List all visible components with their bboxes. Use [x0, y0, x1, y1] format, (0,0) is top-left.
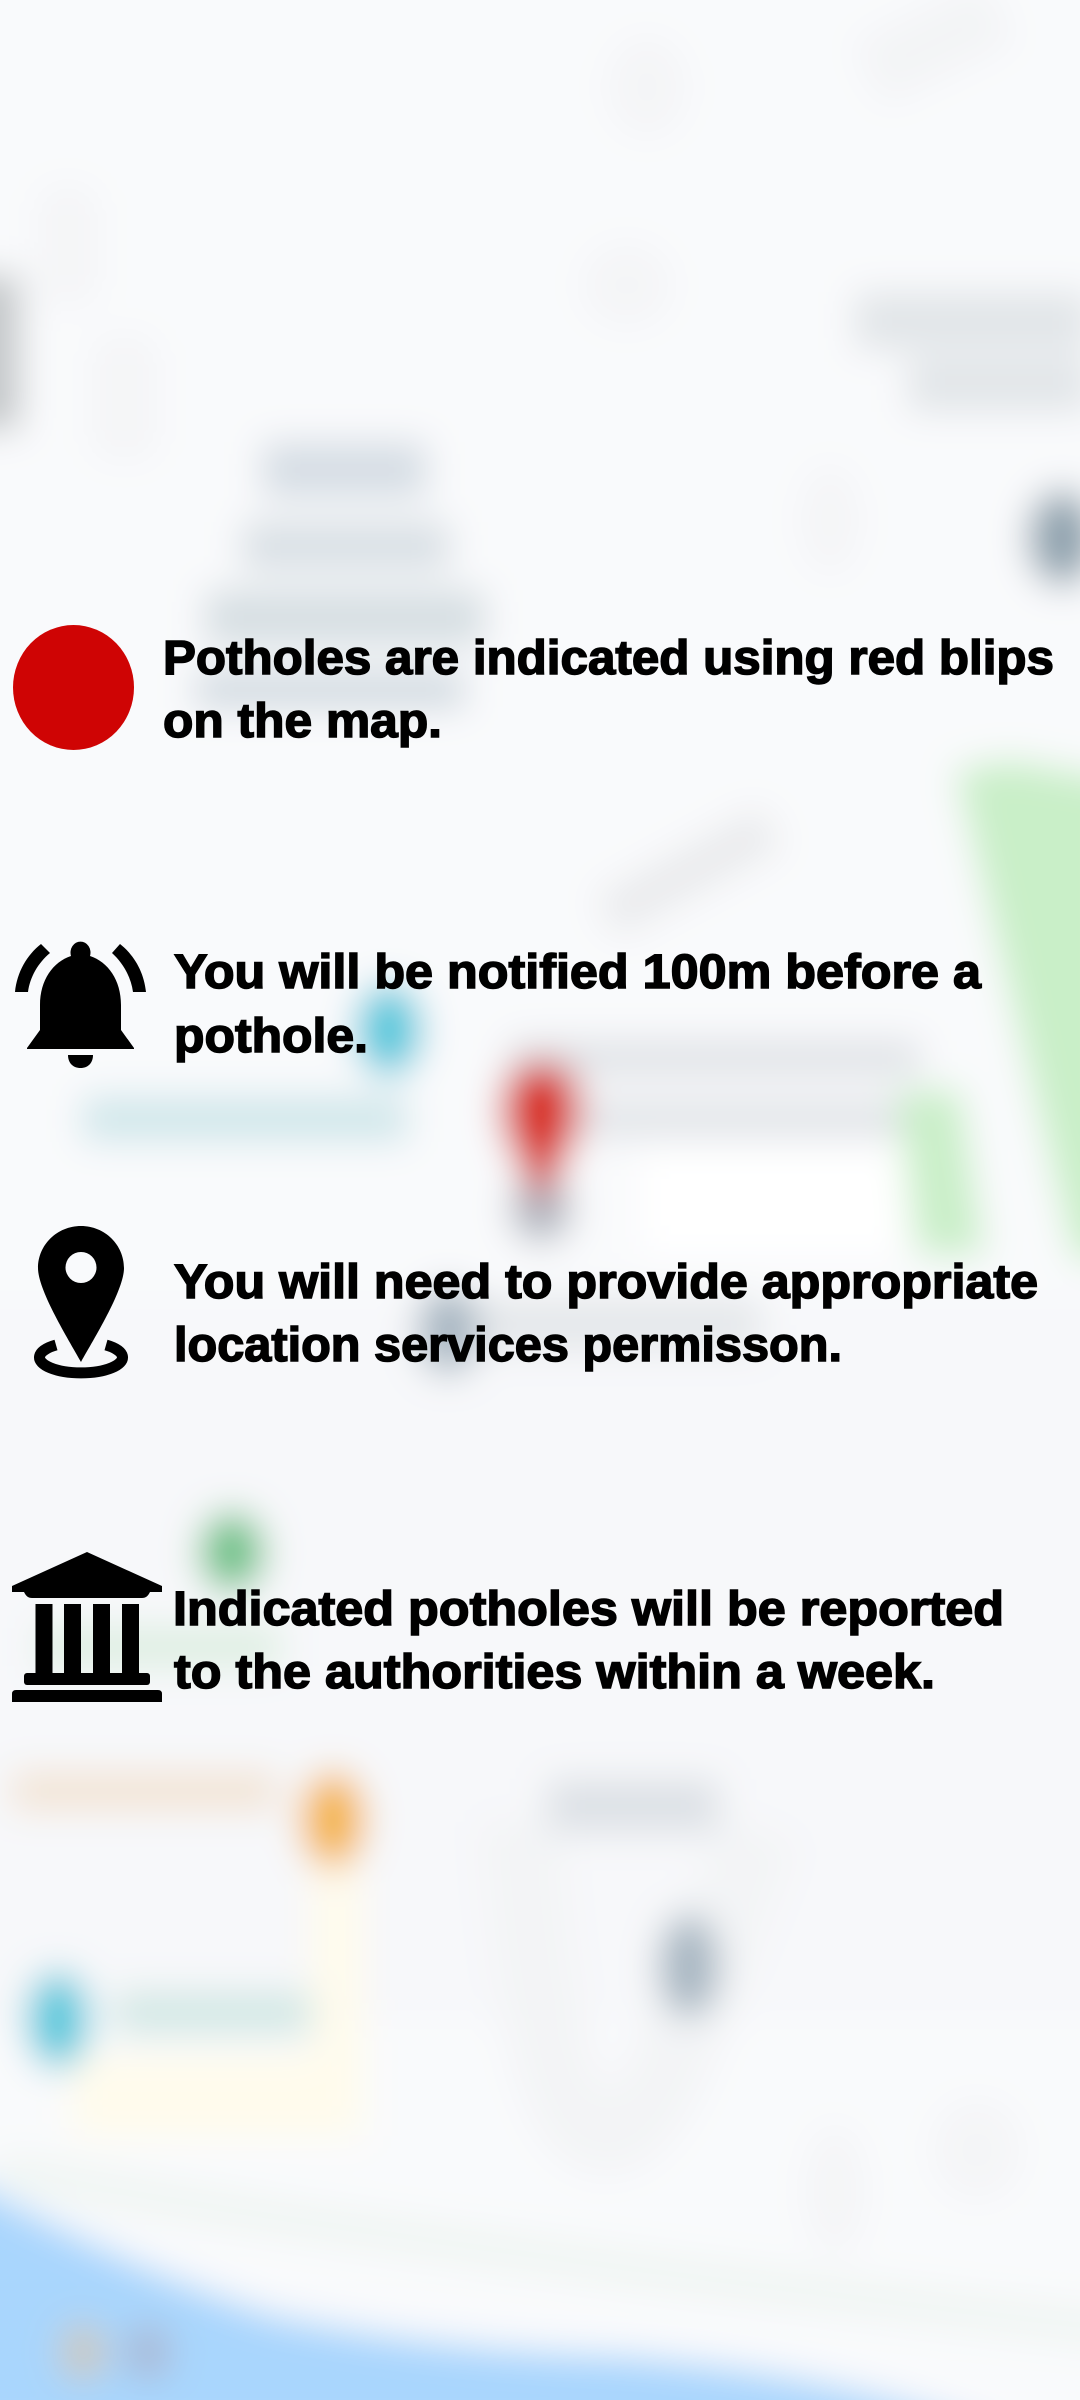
text: notification: pothole.	[174, 1010, 368, 1063]
map: faint roads and labels	[613, 823, 764, 921]
icon: bell	[15, 942, 146, 1068]
text: red blips: on the map.	[163, 695, 442, 748]
text: location permission	[174, 1256, 1038, 1372]
map: water	[0, 2165, 1010, 2400]
text: red blips: Potholes are indicated using red blips	[163, 632, 1054, 685]
text: notification: You will be notified 100m before a	[174, 946, 981, 999]
text: authorities	[173, 1583, 1004, 1699]
text: location permission: location services permisson.	[174, 1319, 842, 1372]
map: shoreline green strip	[0, 2170, 1080, 2330]
map: corner logo	[61, 2324, 170, 2380]
text: red blips	[163, 632, 1054, 748]
map: coloured label blocks	[12, 1096, 408, 2034]
map: grey label blocks	[0, 275, 1080, 1832]
text: location permission: You will need to provide appropriate	[174, 1256, 1038, 1309]
map: green pin	[199, 1512, 265, 1592]
icon: location pin	[38, 1226, 124, 1373]
icon: red blip	[13, 625, 134, 750]
map: orange pin	[301, 1772, 365, 1868]
map: pale road yellow	[72, 1870, 362, 2136]
icon: government building	[12, 1552, 162, 1702]
map: green park	[895, 760, 1080, 1260]
text: authorities: Indicated potholes will be reported	[173, 1583, 1004, 1636]
map: white block	[640, 1145, 905, 1255]
map: red pin	[501, 1062, 581, 1200]
map: cyan pins	[27, 984, 422, 2068]
map: grey pins	[418, 490, 1080, 2018]
text: notification	[174, 946, 981, 1063]
map: faint wash	[0, 1300, 1080, 2020]
text: authorities: to the authorities within a week.	[174, 1646, 935, 1699]
